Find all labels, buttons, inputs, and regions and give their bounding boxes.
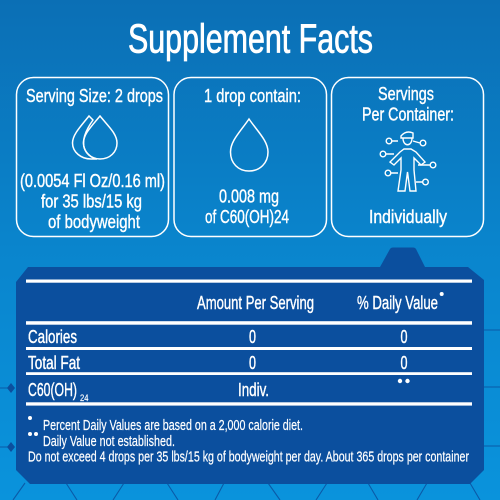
row: calories: 0 <box>400 327 408 347</box>
table rules <box>26 280 472 406</box>
servings heading: Servings <box>378 83 434 104</box>
individually label: Individually <box>369 206 448 227</box>
panel: one drop <box>174 78 326 236</box>
asterisk <box>440 292 444 296</box>
drop compound: of C60(OH)24 <box>205 206 289 227</box>
row: total fat <box>28 353 408 373</box>
serving amount: (0.0054 Fl Oz/0.16 ml) <box>20 170 165 191</box>
row: C60(OH)24: 24 <box>80 393 88 404</box>
serving weight: for 35 lbs/15 kg <box>41 190 142 212</box>
row: calories <box>28 327 408 347</box>
icon: two drops <box>72 116 117 159</box>
header: percent daily value: % Daily Value <box>357 292 438 313</box>
panel: servings per container <box>332 78 484 236</box>
footnotes <box>28 416 469 466</box>
icon: drop <box>230 119 268 171</box>
one drop heading: 1 drop contain: <box>204 85 301 106</box>
row: total fat: 0 <box>400 353 408 373</box>
icon: person with nodes <box>380 132 436 191</box>
footnotes: Percent Daily Values are based on a 2,000 calorie diet. <box>43 418 303 434</box>
title: Supplement Facts <box>128 16 373 62</box>
row: calories: Calories <box>28 327 77 347</box>
drop amount: 0.008 mg <box>219 186 279 206</box>
footnotes: Daily Value not established. <box>43 434 175 450</box>
serving bodyweight: of bodyweight <box>48 211 140 232</box>
panel: serving size <box>16 78 168 236</box>
panel: supplement facts table <box>16 248 484 484</box>
row: total fat: Total Fat <box>28 353 80 373</box>
row: C60(OH)24: Indiv. <box>238 380 269 400</box>
row: C60(OH)24 <box>28 379 410 404</box>
row: total fat: 0 <box>249 353 256 373</box>
per container heading: Per Container: <box>362 104 454 124</box>
serving size heading: Serving Size: 2 drops <box>26 85 163 106</box>
row: calories: 0 <box>249 327 256 347</box>
row: C60(OH)24: C60(OH) <box>28 380 77 400</box>
header: amount per serving: Amount Per Serving <box>197 292 314 313</box>
